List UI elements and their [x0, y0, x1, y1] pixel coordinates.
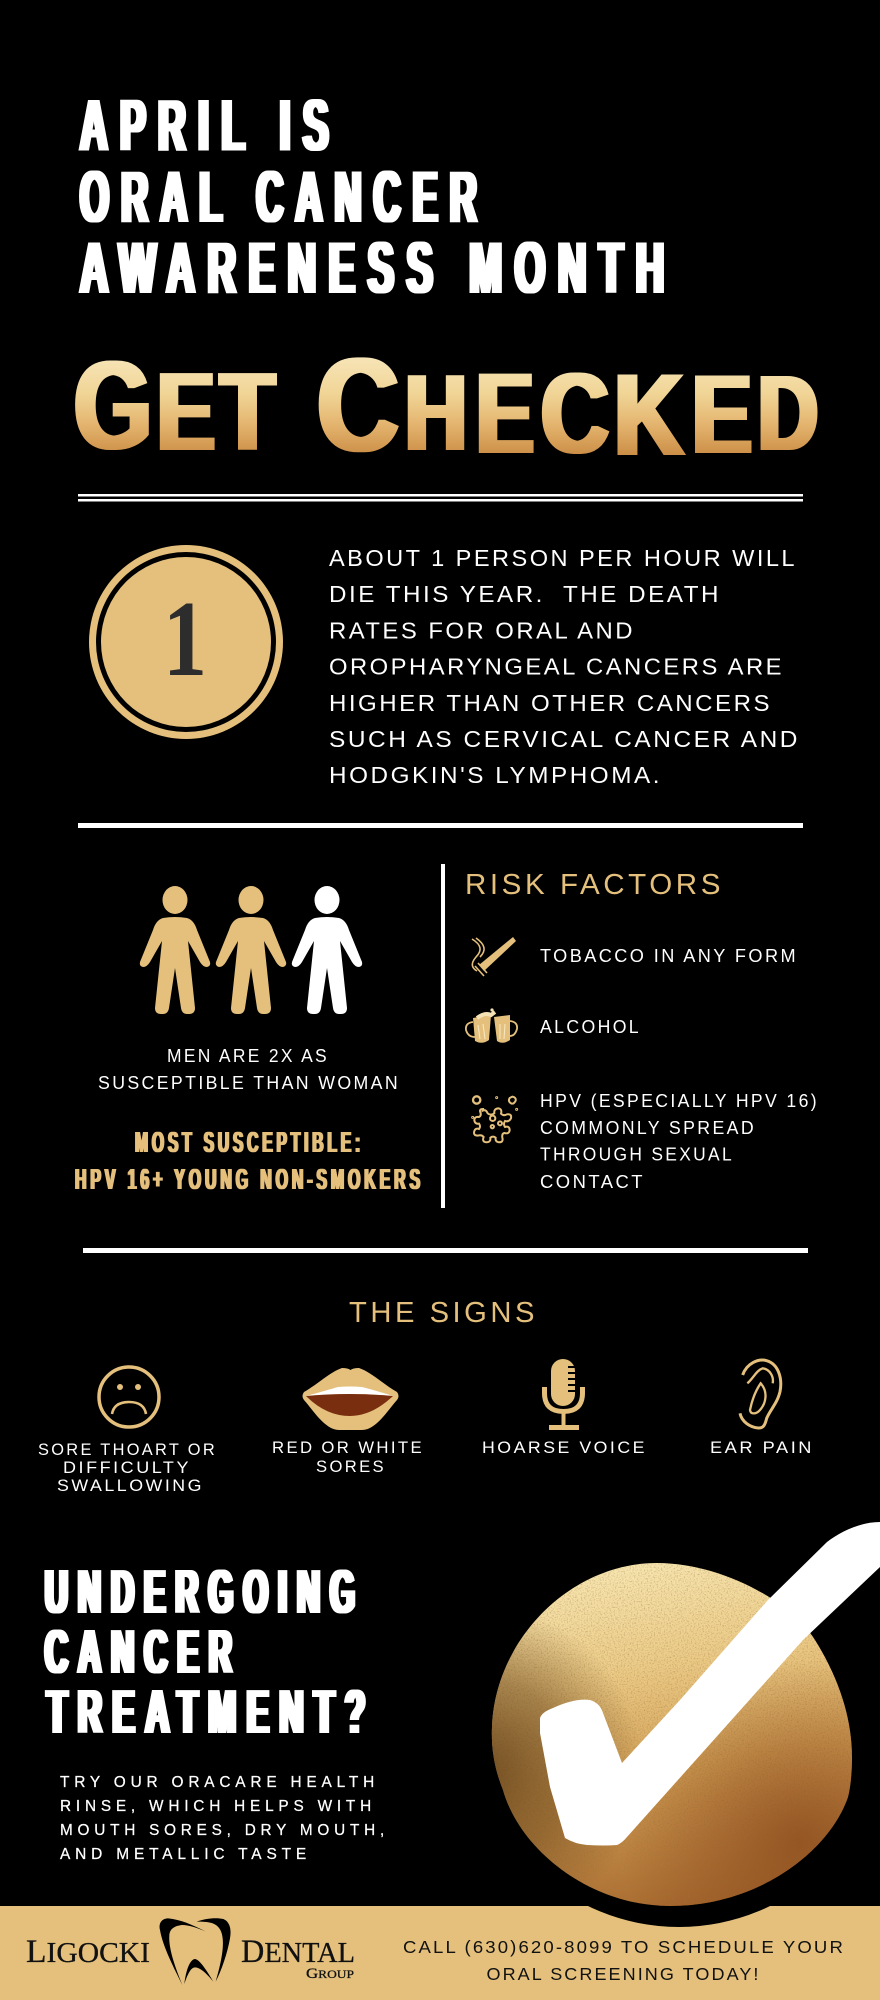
text block: oracare rinse	[60, 1774, 389, 1863]
text: hpv	[540, 1091, 819, 1192]
icon: gold circle with check mark	[471, 1511, 880, 1927]
icon: white check mark	[540, 1522, 880, 1846]
icon: beer mugs	[466, 1008, 517, 1043]
heading: Get Checked: H	[405, 352, 467, 474]
text: hpv: THROUGH SEXUAL	[540, 1144, 734, 1164]
text: hoarse voice: HOARSE VOICE	[482, 1438, 647, 1457]
heading: Get Checked: C	[541, 350, 609, 478]
text: men are 2x as susceptible: MEN ARE 2X AS	[167, 1046, 329, 1066]
text: hpv: HPV (ESPECIALLY HPV 16)	[540, 1091, 819, 1111]
text: hpv: COMMONLY SPREAD	[540, 1118, 756, 1138]
text block: death rate statistic: HIGHER THAN OTHER CANCERS	[329, 690, 772, 716]
text block: oracare rinse: MOUTH SORES, DRY MOUTH,	[60, 1822, 389, 1839]
text: sore throat: SWALLOWING	[57, 1476, 204, 1495]
heading: Get Checked: E	[476, 350, 534, 478]
heading: Get Checked: E	[157, 350, 215, 474]
heading: undergoing cancer treatment: TREATMENT?	[47, 1678, 376, 1747]
text: alcohol: ALCOHOL	[540, 1017, 641, 1037]
icon: number 1 badge	[89, 545, 283, 739]
text block: death rate statistic: DIE THIS YEAR. THE DEATH	[329, 581, 721, 607]
icon: lips	[302, 1368, 398, 1430]
text: sore throat: DIFFICULTY	[63, 1458, 191, 1477]
text: ligocki dental group logo: LIGOCKI	[26, 1934, 150, 1970]
heading: Get Checked: K	[614, 349, 684, 480]
text block: death rate statistic: RATES FOR ORAL AND	[329, 618, 635, 644]
icon: three people	[140, 886, 362, 1014]
panel: the signs	[38, 1297, 814, 1495]
heading: Get Checked	[74, 331, 818, 480]
text block: death rate statistic: HODGKIN'S LYMPHOMA.	[329, 762, 662, 788]
title: April is Oral Cancer Awareness Month: APRIL IS	[80, 86, 341, 166]
text: call to action: ORAL SCREENING TODAY!	[486, 1964, 760, 1984]
icon: virus	[472, 1096, 517, 1142]
text: men are 2x as susceptible	[98, 1046, 400, 1093]
heading: Get Checked: E	[692, 352, 752, 477]
text: call to action: CALL (630)620-8099 TO SCHEDULE YOUR	[403, 1937, 845, 1957]
text: sore throat: SORE THOART OR	[38, 1440, 217, 1459]
title: April is Oral Cancer Awareness Month	[80, 86, 677, 309]
text: most susceptible: MOST SUSCEPTIBLE:	[135, 1127, 364, 1159]
text: most susceptible: HPV 16+ YOUNG NON-SMOKERS	[75, 1164, 424, 1196]
icon: sad face	[99, 1367, 159, 1427]
icon: microphone	[544, 1359, 582, 1430]
heading: Get Checked: G	[74, 335, 152, 476]
text: ligocki dental group logo: GROUP	[306, 1966, 354, 1982]
panel: men susceptibility	[75, 886, 424, 1196]
heading: undergoing cancer treatment	[45, 1558, 376, 1747]
text: sore throat	[38, 1440, 217, 1495]
title: April is Oral Cancer Awareness Month: ORAL CANCER	[80, 157, 489, 238]
heading: the signs: THE SIGNS	[349, 1297, 538, 1329]
text: ligocki dental group logo: DENTAL	[241, 1934, 355, 1970]
heading: Get Checked: C	[317, 331, 399, 480]
text: men are 2x as susceptible: SUSCEPTIBLE THAN WOMAN	[98, 1073, 400, 1093]
icon: number 1 badge: 1	[163, 580, 207, 699]
panel: risk factors	[465, 869, 819, 1192]
text: most susceptible	[75, 1127, 424, 1196]
text: hpv: CONTACT	[540, 1172, 645, 1192]
text block: death rate statistic: SUCH AS CERVICAL CANCER AND	[329, 726, 800, 752]
text: ligocki dental group logo	[26, 1934, 355, 1982]
panel: footer band	[0, 1906, 880, 2000]
text block: death rate statistic: ABOUT 1 PERSON PER HOUR WILL	[329, 545, 797, 571]
icon: tooth	[160, 1918, 231, 1985]
icon: ear	[740, 1360, 781, 1428]
text: red or white sores: RED OR WHITE	[272, 1438, 424, 1457]
text: red or white sores: SORES	[316, 1457, 386, 1476]
text block: oracare rinse: RINSE, WHICH HELPS WITH	[60, 1798, 376, 1815]
heading: Get Checked: T	[220, 350, 275, 474]
heading: Get Checked: D	[758, 352, 818, 473]
text block: oracare rinse: AND METALLIC TASTE	[60, 1846, 311, 1863]
text: tobacco: TOBACCO IN ANY FORM	[540, 946, 798, 966]
text: ear pain: EAR PAIN	[710, 1438, 814, 1457]
icon: cigarette	[472, 937, 516, 976]
text block: oracare rinse: TRY OUR ORACARE HEALTH	[60, 1774, 379, 1791]
text: call to action	[403, 1937, 845, 1984]
heading: risk factors: RISK FACTORS	[465, 869, 724, 901]
text block: death rate statistic	[329, 545, 800, 788]
heading: undergoing cancer treatment: CANCER	[45, 1618, 242, 1687]
text: red or white sores	[272, 1438, 424, 1476]
heading: undergoing cancer treatment: UNDERGOING	[45, 1558, 365, 1627]
text block: death rate statistic: OROPHARYNGEAL CANCERS ARE	[329, 654, 784, 680]
